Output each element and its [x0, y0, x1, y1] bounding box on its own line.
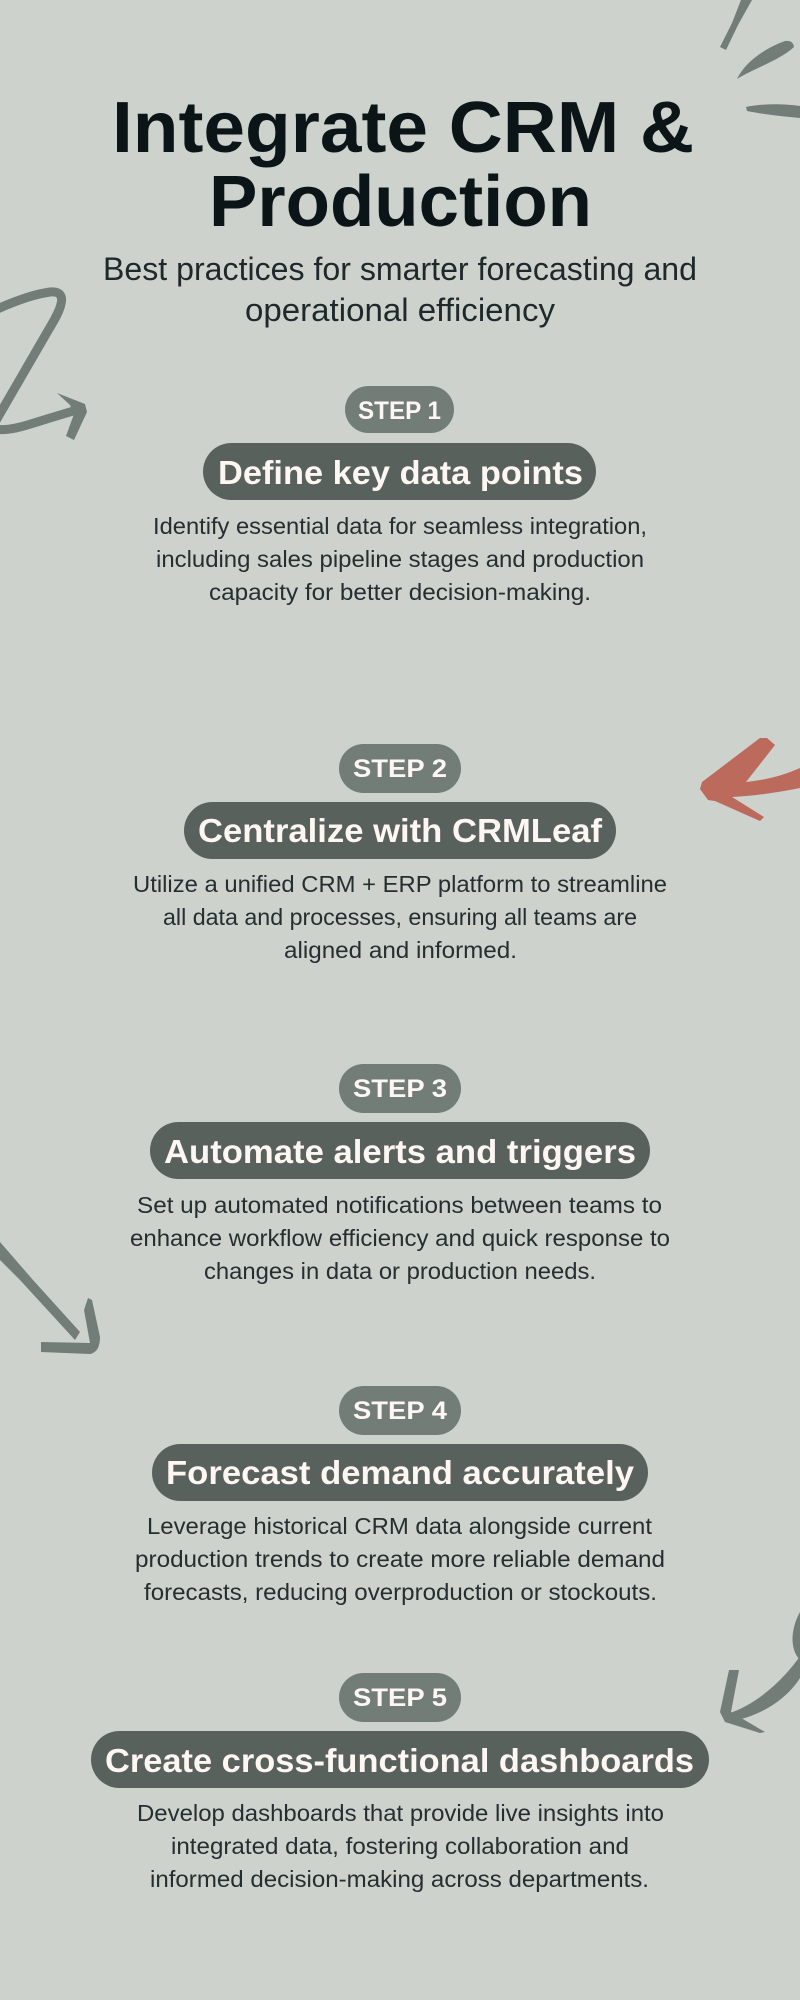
step 4 badge: STEP 4: [353, 1397, 447, 1425]
step 2: [133, 744, 667, 963]
step 3: [130, 1064, 670, 1284]
step 1 description: [153, 513, 647, 605]
step 2 description: all data and processes, ensuring all teams are: [163, 904, 637, 930]
step 2 heading: Centralize with CRMLeaf: [198, 812, 603, 849]
title: Integrate CRM &: [112, 88, 694, 168]
step 2 description: Utilize a unified CRM + ERP platform to streamline: [133, 871, 667, 897]
step 3 heading: [150, 1122, 650, 1179]
step 4 badge: [339, 1386, 461, 1435]
step 5: [91, 1673, 709, 1892]
step 4 description: [135, 1513, 665, 1605]
arrow: lower right curved arrow: [720, 1612, 800, 1733]
arrow: red brush arrow: [700, 738, 800, 821]
step 1 description: including sales pipeline stages and production: [156, 546, 644, 572]
step 1 badge: [345, 386, 454, 433]
step 3 description: Set up automated notifications between teams to: [137, 1192, 662, 1218]
step 4 description: Leverage historical CRM data alongside current: [147, 1513, 653, 1539]
step 4 heading: [152, 1444, 648, 1501]
step 4 description: forecasts, reducing overproduction or stockouts.: [144, 1579, 657, 1605]
title: Production: [209, 162, 592, 242]
step 3 description: [130, 1192, 670, 1284]
step 3 heading: Automate alerts and triggers: [164, 1133, 636, 1170]
icon: top right brush strokes: [720, 0, 800, 118]
step 2 heading: [184, 802, 616, 859]
step 4 description: production trends to create more reliable demand: [135, 1546, 665, 1572]
step 3 badge: [339, 1064, 461, 1113]
step 5 description: informed decision-making across departments.: [150, 1866, 649, 1892]
step 5 heading: Create cross-functional dashboards: [105, 1742, 694, 1779]
step 1: [153, 386, 647, 605]
arrow: left squiggle: [0, 292, 87, 440]
step 1 heading: [203, 443, 596, 500]
subtitle: operational efficiency: [245, 292, 555, 328]
step 1 heading: Define key data points: [218, 454, 583, 491]
step 3 description: enhance workflow efficiency and quick response to: [130, 1225, 670, 1251]
title: [112, 88, 694, 242]
step 1 description: capacity for better decision-making.: [209, 579, 591, 605]
arrow: lower left diagonal arrow: [0, 1242, 100, 1354]
step 3 description: changes in data or production needs.: [204, 1258, 596, 1284]
step 2 badge: STEP 2: [353, 755, 447, 783]
step 5 description: integrated data, fostering collaboration and: [171, 1833, 629, 1859]
step 5 description: Develop dashboards that provide live insights into: [137, 1800, 664, 1826]
step 4: [135, 1386, 665, 1605]
subtitle: [103, 251, 697, 328]
step 2 description: aligned and informed.: [284, 937, 517, 963]
step 4 heading: Forecast demand accurately: [166, 1454, 635, 1491]
step 3 badge: STEP 3: [353, 1075, 447, 1103]
step 5 description: [137, 1800, 664, 1892]
subtitle: Best practices for smarter forecasting and: [103, 251, 697, 287]
step 5 badge: [339, 1673, 461, 1722]
step 1 badge: STEP 1: [358, 397, 441, 425]
step 2 badge: [339, 744, 461, 793]
step 2 description: [133, 871, 667, 963]
step 5 badge: STEP 5: [353, 1684, 447, 1712]
step 1 description: Identify essential data for seamless integration,: [153, 513, 647, 539]
step 5 heading: [91, 1731, 709, 1788]
